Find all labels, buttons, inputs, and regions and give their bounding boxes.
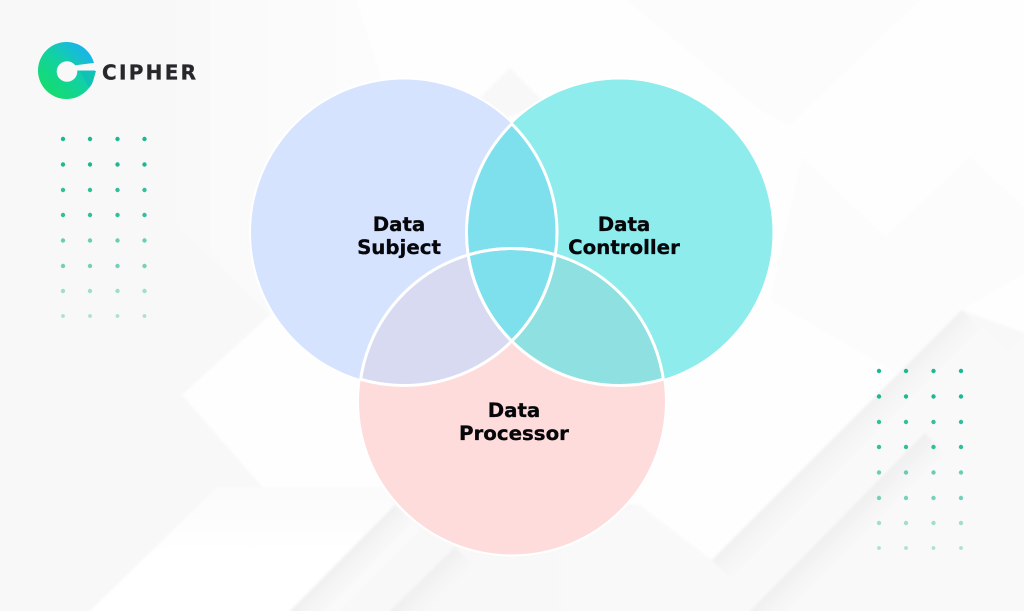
dot grid: upper left: [61, 137, 147, 318]
label: Data Processor: Processor: [459, 422, 569, 445]
label: Data Controller: Controller: [568, 236, 680, 259]
overlap: Subject and Controller: [468, 126, 556, 339]
white rim behind circles: [249, 78, 774, 556]
overlap outlines: [359, 123, 665, 387]
label: Data Subject: Data: [373, 213, 425, 236]
icon: logo ring: [38, 42, 97, 99]
logo wordmark: CIPHER: [102, 60, 198, 84]
overlap: Controller and Processor: [514, 256, 662, 384]
label: Data Processor: Data: [488, 399, 540, 422]
label: Data Subject: Subject: [357, 236, 441, 259]
venn diagram: [249, 78, 774, 556]
overlap: Subject and Processor: [362, 257, 510, 384]
circle: Data Processor: [359, 248, 665, 554]
dot grid: lower right: [877, 369, 963, 550]
circle: Data Controller: [466, 80, 772, 386]
circle: Data Subject: [251, 80, 557, 386]
label: Data Controller: Data: [598, 213, 650, 236]
logo: CIPHER: [38, 42, 198, 99]
